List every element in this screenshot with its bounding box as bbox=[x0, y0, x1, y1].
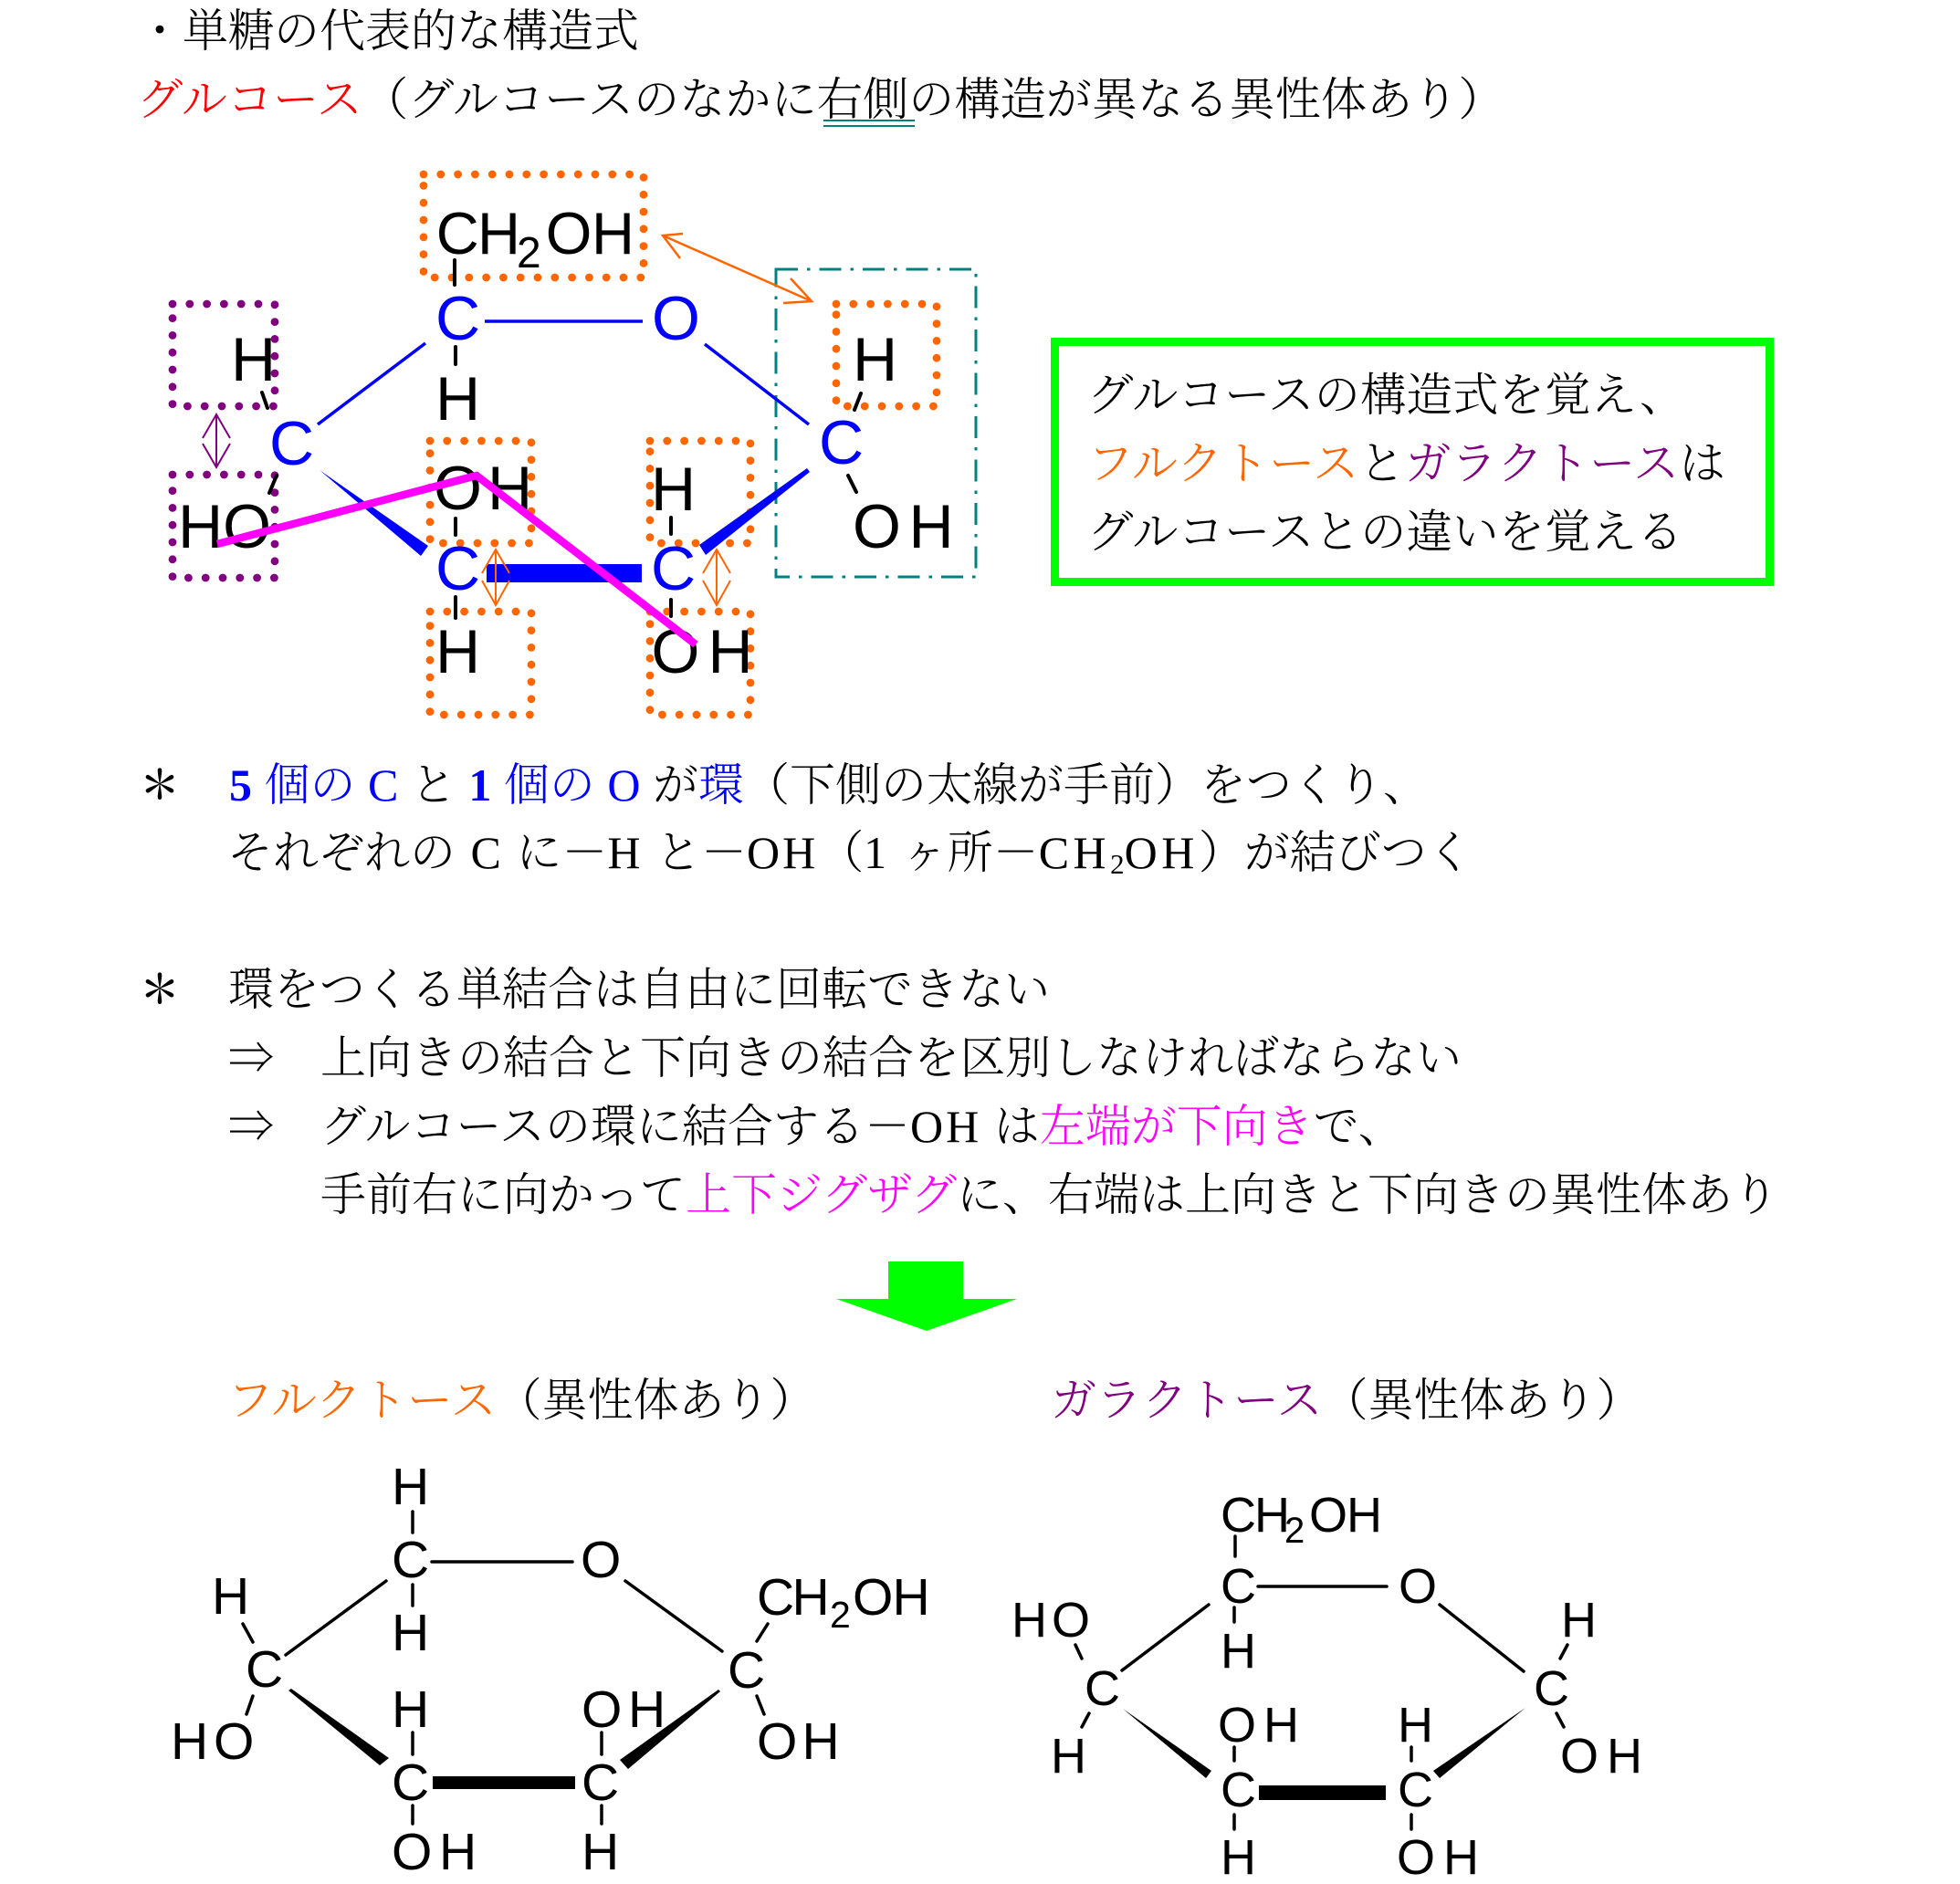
galactose atoms: C bbox=[1398, 1763, 1433, 1817]
galactose bonds bbox=[1075, 1536, 1567, 1829]
magenta zigzag line bbox=[217, 476, 696, 644]
fructose atoms: C bbox=[728, 1641, 765, 1700]
galactose atoms: H bbox=[1561, 1593, 1597, 1648]
fructose atoms: OH bbox=[757, 1712, 840, 1771]
dotted boxes: purple bbox=[173, 304, 275, 578]
ring atoms: C bbox=[819, 408, 864, 477]
substituent atoms: H bbox=[435, 364, 480, 434]
fructose atoms: O bbox=[581, 1531, 621, 1589]
note 2 line 3: グルコースの環に結合する－OH は左端が下向きで、 bbox=[320, 1101, 1404, 1152]
ring atoms: C bbox=[269, 409, 314, 478]
dash-dot box: right side bbox=[776, 269, 976, 577]
callout text line 2: フルクトースとガラクトースは bbox=[1087, 438, 1725, 489]
galactose atoms: CH bbox=[1221, 1488, 1290, 1543]
ring atoms: C bbox=[435, 284, 480, 353]
galactose atoms: 2 bbox=[1284, 1511, 1305, 1551]
fructose atoms: 2 bbox=[830, 1594, 851, 1636]
diagram: fructose structure bbox=[171, 1460, 930, 1881]
substituent atoms: H bbox=[651, 455, 696, 524]
arrow: orange double right bbox=[703, 550, 730, 605]
substituent atoms: OH bbox=[652, 617, 753, 686]
galactose atoms: H bbox=[1221, 1624, 1256, 1679]
heading: galactose: ガラクトース（異性体あり） bbox=[1051, 1375, 1641, 1426]
fructose atoms: CH bbox=[757, 1568, 830, 1627]
fructose atoms: C bbox=[392, 1753, 429, 1812]
fructose atoms: C bbox=[582, 1753, 619, 1812]
title: ・単糖の代表的な構造式 bbox=[137, 5, 639, 57]
galactose atoms: H bbox=[1221, 1830, 1256, 1884]
fructose bonds bbox=[243, 1512, 768, 1824]
diagram: glucose structure bbox=[168, 170, 977, 719]
note 2 line 2: 上向きの結合と下向きの結合を区別しなければならない bbox=[320, 1032, 1462, 1083]
galactose atoms: H bbox=[1398, 1698, 1433, 1753]
fructose atoms: HO bbox=[171, 1712, 254, 1771]
heading: glucose: グルコース（グルコースのなかに右側の構造が異なる異性体あり） bbox=[137, 74, 1504, 125]
note 1 line 2: それぞれの C に－H と－OH（1 ヶ所－CH2OH）が結びつく bbox=[227, 827, 1473, 880]
galactose atoms: C bbox=[1221, 1763, 1256, 1817]
note 2 line 4: 手前右に向かって上下ジグザグに、右端は上向きと下向きの異性体あり bbox=[320, 1169, 1778, 1220]
arrow: green down bbox=[836, 1261, 1017, 1331]
galactose atoms: C bbox=[1534, 1661, 1569, 1716]
fructose atoms: C bbox=[246, 1640, 283, 1699]
galactose atoms: OH bbox=[1397, 1830, 1479, 1884]
substituent atoms: HO bbox=[178, 492, 271, 561]
fructose atoms: C bbox=[392, 1531, 429, 1589]
callout: green box bbox=[1051, 338, 1774, 586]
ring atoms: C bbox=[651, 534, 696, 603]
substituent atoms: H bbox=[231, 325, 276, 394]
ring atoms: C bbox=[435, 534, 480, 603]
galactose atoms: HO bbox=[1011, 1593, 1090, 1648]
note 1: asterisk: ＊ bbox=[140, 763, 180, 808]
fructose atoms: OH bbox=[582, 1680, 666, 1739]
galactose atoms: OH bbox=[1218, 1698, 1299, 1753]
galactose atoms: C bbox=[1221, 1559, 1256, 1614]
fructose atoms: H bbox=[582, 1823, 619, 1881]
galactose atoms: H bbox=[1051, 1729, 1086, 1784]
arrow: orange diagonal bbox=[663, 234, 812, 303]
galactose atoms: OH bbox=[1309, 1488, 1382, 1543]
callout text line 1: グルコースの構造式を覚え、 bbox=[1087, 370, 1685, 421]
note 2 line 1: 環をつくる単結合は自由に回転できない bbox=[228, 964, 1050, 1015]
substituent atoms: H bbox=[435, 617, 480, 686]
arrow: purple double bbox=[203, 414, 230, 467]
fructose atoms: H bbox=[392, 1680, 429, 1739]
galactose atoms: OH bbox=[1560, 1729, 1642, 1784]
fructose atoms: OH bbox=[392, 1823, 477, 1881]
substituent atoms: 2 bbox=[517, 229, 541, 277]
substituent atoms: OH bbox=[546, 200, 634, 267]
dotted boxes: orange bbox=[424, 174, 937, 715]
double underline bbox=[823, 120, 915, 127]
galactose atoms: O bbox=[1399, 1559, 1437, 1614]
arrow: orange double left bbox=[482, 550, 509, 605]
note 1 line 1: 5 個の C と 1 個の O が環（下側の太線が手前）をつくり、 bbox=[229, 759, 1429, 811]
galactose atoms: C bbox=[1085, 1661, 1120, 1716]
note 2: asterisk: ＊ bbox=[140, 968, 180, 1012]
substituent atoms: OH bbox=[853, 492, 954, 561]
substituent atoms: OH bbox=[434, 454, 532, 523]
diagram: galactose structure bbox=[1011, 1488, 1642, 1884]
ring bonds bbox=[318, 321, 810, 582]
heading: fructose: フルクトース（異性体あり） bbox=[227, 1375, 816, 1426]
fructose atoms bbox=[171, 1458, 930, 1881]
substituent atoms: CH bbox=[436, 200, 520, 267]
fructose atoms: H bbox=[212, 1567, 249, 1626]
galactose atoms bbox=[1011, 1488, 1642, 1884]
ring atoms bbox=[269, 284, 864, 603]
ring atoms: O bbox=[652, 284, 700, 353]
fructose atoms: OH bbox=[853, 1568, 930, 1627]
note 2 arrow 2: ⇒ bbox=[228, 1101, 274, 1152]
fructose atoms: H bbox=[392, 1604, 429, 1662]
callout text line 3: グルコースとの違いを覚える bbox=[1087, 507, 1682, 558]
substituent atoms: H bbox=[853, 325, 897, 394]
substituent bonds bbox=[262, 260, 861, 618]
substituent atoms bbox=[178, 200, 954, 686]
note 2 arrow 1: ⇒ bbox=[228, 1032, 274, 1083]
